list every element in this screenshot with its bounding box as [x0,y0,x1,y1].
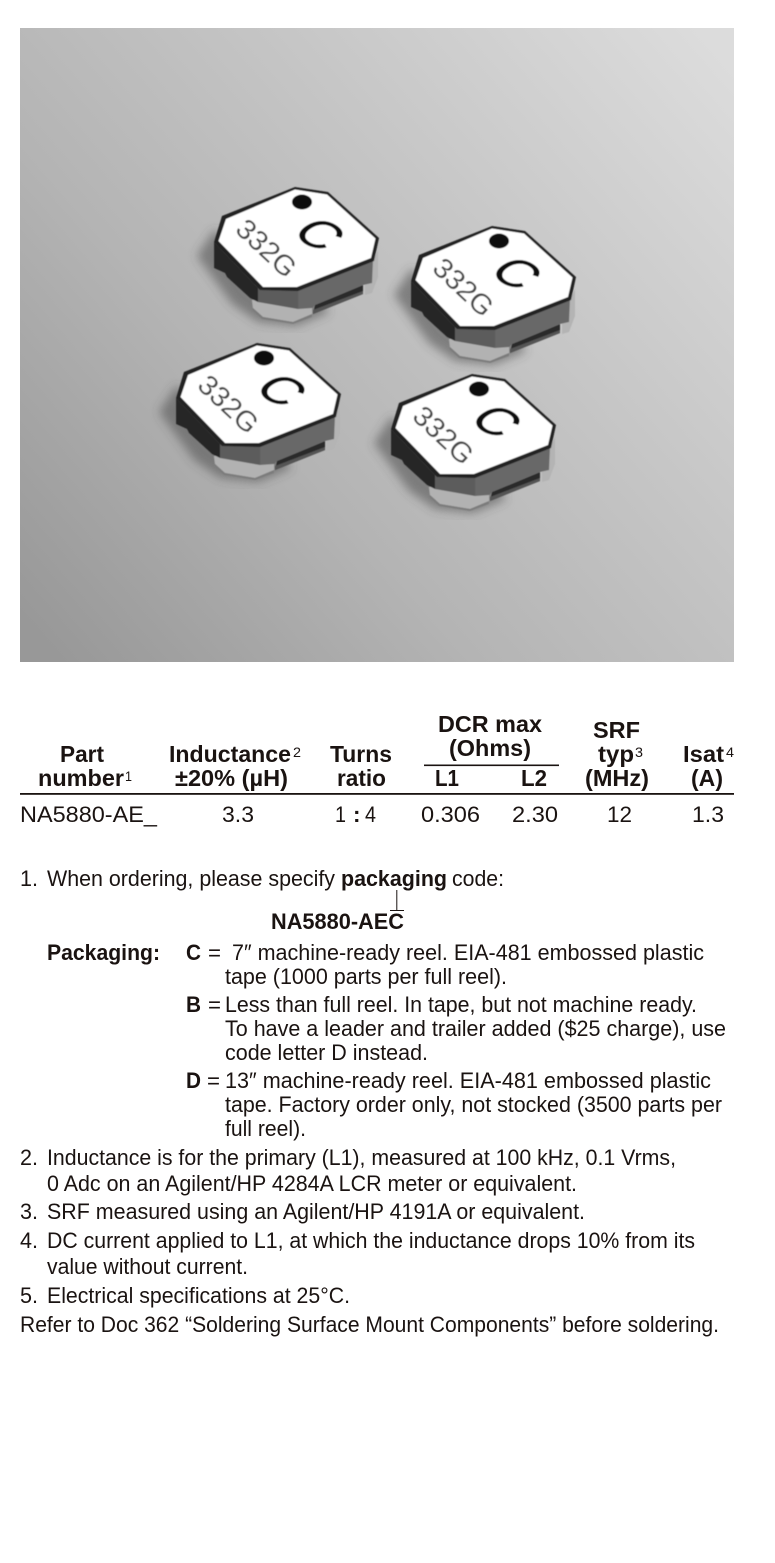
specification table [20,711,734,827]
table data row [20,802,724,827]
table header row: L2 [521,765,547,791]
packaging options: Packaging: [47,940,160,965]
table data row: 4 [365,802,376,827]
note 2: inductance [20,1145,676,1196]
note 1: ordering: When ordering, please specify [47,866,336,891]
note 4: DC current: DC current applied to L1, at which the inductance drops 10% from its [47,1228,695,1253]
table data row: NA5880-AE_ [20,802,157,827]
table header row: L1 [435,765,459,791]
note 4: DC current [20,1228,695,1279]
packaging options: 13″ machine-ready reel. EIA-481 embossed plastic [225,1068,711,1093]
inductor chip, lower left: 332G [192,369,265,440]
inductor chip, upper left: 332G [230,213,303,284]
table header row: number [38,765,124,791]
table header row: Turns [330,741,392,767]
table header row: Part [60,741,104,767]
note 5: temperature: 5. [20,1283,38,1308]
table header row: Inductance [169,741,291,767]
table data row: : [353,802,360,827]
note 3: SRF: SRF measured using an Agilent/HP 4191A or equivalent. [47,1199,585,1224]
inductor chip, upper left: C [281,210,359,259]
table header row: 2 [293,744,301,760]
inductor chip, lower right: 332G [407,400,480,471]
table data row: 12 [607,802,632,827]
packaging options: 7″ machine-ready reel. EIA-481 embossed plastic [232,940,704,965]
table data row: 0.306 [421,802,480,827]
table header row: (A) [691,765,723,791]
table header row: 4 [726,744,734,760]
inductor chip, lower left: C [243,366,321,415]
inductor chip, upper right [394,226,576,365]
packaging options: D [186,1068,201,1093]
note 1: ordering: 1. [20,866,38,891]
soldering reference: Refer to Doc 362 “Soldering Surface Mount Components” before soldering. [20,1312,719,1337]
inductor chip, upper right: C [478,249,556,298]
note 1: ordering: packaging [341,866,447,891]
note 4: DC current: 4. [20,1228,38,1253]
packaging options: = [208,940,221,965]
note 3: SRF: 3. [20,1199,38,1224]
note 2: inductance: 0 Adc on an Agilent/HP 4284A LCR meter or equivalent. [47,1171,577,1196]
packaging options [47,940,726,1141]
part number code with pointer [271,890,404,934]
table header row: 1 [125,768,132,784]
table header row: 3 [635,744,643,760]
table header row: ratio [337,765,386,791]
table header row: (Ohms) [449,735,531,761]
table data row: 3.3 [222,802,254,827]
packaging options: full reel). [225,1116,306,1141]
inductor chip, lower right [374,374,556,513]
table data row: 2.30 [512,802,558,827]
note 1: ordering [20,866,504,891]
note 5: temperature: Electrical specifications at 25°C. [47,1283,350,1308]
table header row: Isat [683,741,724,767]
packaging options: To have a leader and trailer added ($25 charge), use [225,1016,726,1041]
packaging options: Less than full reel. In tape, but not machine ready. [225,992,697,1017]
table data row: 1.3 [692,802,724,827]
note 4: DC current: value without current. [47,1254,248,1279]
packaging options: C [186,940,201,965]
note 2: inductance: 2. [20,1145,38,1170]
packaging options: = [208,992,221,1017]
packaging options: code letter D instead. [225,1040,428,1065]
packaging options: tape. Factory order only, not stocked (3500 parts per [225,1092,722,1117]
inductor chip, lower right: C [458,397,536,446]
note 2: inductance: Inductance is for the primary (L1), measured at 100 kHz, 0.1 Vrms, [47,1145,676,1170]
packaging options: tape (1000 parts per full reel). [225,964,507,989]
inductor chip, lower left [159,343,341,482]
table header row: DCR max [438,711,542,737]
panel: product photo [20,28,734,662]
inductor chip, upper right: 332G [427,252,500,323]
table header row: typ [598,741,634,767]
packaging options: = [207,1068,220,1093]
inductor chip, upper left [197,187,379,326]
part number code with pointer: NA5880-AEC [271,909,404,934]
packaging options: B [186,992,201,1017]
footnotes [20,866,726,1337]
table header row: ±20% (µH) [175,765,288,791]
note 1: ordering: code: [452,866,504,891]
table header row: (MHz) [585,765,649,791]
table data row: 1 [335,802,346,827]
table header row [38,711,734,791]
table header row: SRF [593,717,640,743]
